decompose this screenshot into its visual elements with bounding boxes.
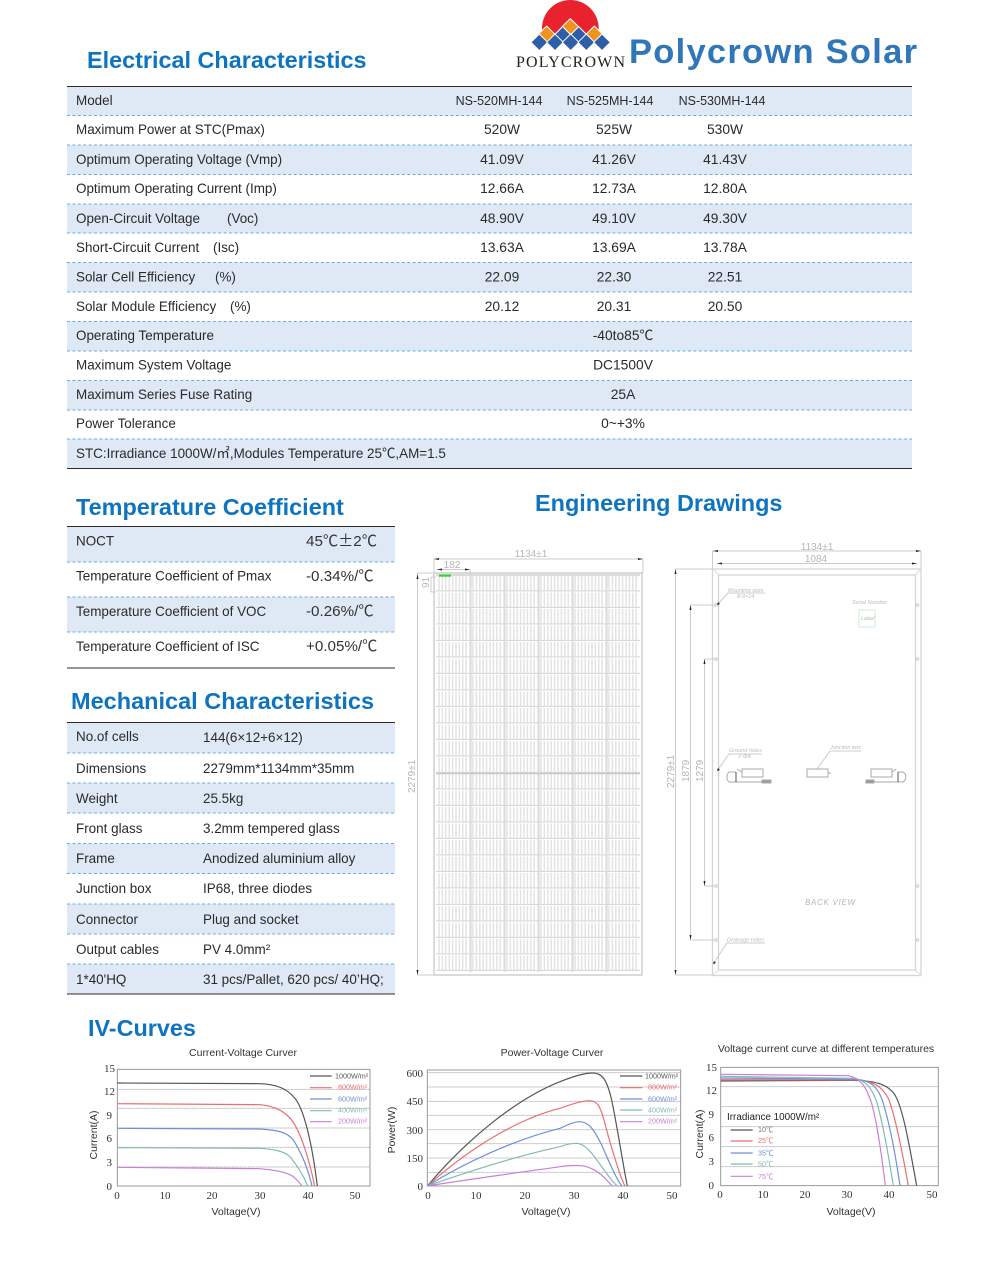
row: Power Tolerance: 0~+3% [601, 416, 645, 431]
panel: temperature coefficient table [67, 526, 395, 668]
x axis labels: 20 [520, 1190, 531, 1202]
y axis labels: 0 [708, 1180, 714, 1192]
row: Module Efficiency [76, 299, 743, 314]
x axis labels: 40 [302, 1190, 314, 1202]
row: Model [76, 93, 765, 108]
row: Voc: 48.90V [480, 211, 525, 226]
x axis labels: 0 [717, 1189, 723, 1201]
dimension: 1879: 1879 [681, 759, 692, 782]
row: NOCT: NOCT [76, 534, 114, 548]
row: Fuse Rating: Maximum Series Fuse Rating [76, 387, 252, 402]
row: cells [76, 729, 303, 745]
connector: centre junction box [807, 769, 831, 777]
dimension: width 1134: 1134±1 [801, 542, 834, 553]
y axis labels: 300 [406, 1125, 424, 1137]
row: System Voltage: Maximum System Voltage [76, 358, 231, 372]
chart: power-voltage curves [386, 1047, 681, 1218]
row: frame: Frame [76, 851, 115, 866]
row: weight: Weight [76, 791, 118, 806]
row: Cell Efficiency [76, 270, 742, 284]
row: STC note: STC:Irradiance 1000W/㎡,Modules Temperature 25℃,AM=1.5 [76, 446, 446, 461]
y axis labels: 9 [106, 1110, 112, 1122]
front green marker [439, 574, 451, 577]
x axis labels: 30 [254, 1190, 266, 1202]
logo: Polycrown emblem [532, 0, 610, 50]
row: Isc: (Isc) [213, 240, 239, 255]
row: ISC coefficient: +0.05%/℃ [306, 638, 377, 655]
row: Imp: Optimum Operating Current (Imp) [76, 181, 277, 196]
legend: irradiance: 400W/m² [648, 1106, 678, 1114]
row: Pmax coefficient [76, 568, 374, 585]
heading: IV-Curves: IV-Curves [88, 1015, 196, 1041]
legend: irradiance [335, 1072, 369, 1126]
legend: temperatures: 50℃ [758, 1160, 773, 1168]
x axis labels: 40 [884, 1189, 895, 1201]
legend: irradiance: 600W/m² [648, 1094, 678, 1104]
dimension: width 1084: 1084 [805, 554, 828, 565]
row: Voc: (Voc) [227, 211, 258, 226]
legend: temperatures: 10℃ [758, 1125, 773, 1134]
row: Isc: 13.63A [480, 240, 525, 255]
legend: temperatures: 25℃ [758, 1136, 773, 1145]
row: Imp: 12.66A [480, 181, 525, 196]
dimension: height 2279: 2279±1 [407, 759, 418, 793]
y axis labels: 3 [106, 1157, 112, 1169]
row: Operating Temperature: Operating Temperature [76, 328, 214, 343]
row: container loading [76, 972, 384, 987]
y axis labels: 15 [706, 1062, 718, 1074]
dimension: 182 [437, 560, 470, 575]
row: Operating Temperature: -40to85℃ [593, 328, 653, 343]
legend: irradiance: 800W/m² [648, 1082, 678, 1092]
row: Vmp: 41.43V [703, 152, 748, 167]
note: serial number label [852, 600, 888, 627]
row: Isc [76, 240, 748, 255]
row: Vmp: Optimum Operating Voltage (Vmp) [76, 152, 282, 167]
row: connector: Plug and socket [203, 912, 299, 927]
row: Module Efficiency: 20.50 [708, 299, 743, 314]
chart: current-voltage curves [88, 1047, 370, 1218]
heading: Mechanical Characteristics: Mechanical Characteristics [71, 688, 374, 714]
y axis labels: 450 [406, 1096, 424, 1108]
dimension: width 1134: 1134±1 [515, 549, 548, 560]
dimension: height 2279 [407, 573, 434, 975]
row: frame: Anodized aluminium alloy [203, 851, 356, 866]
x axis labels: 0 [114, 1190, 120, 1202]
row: Maximum Power: 520W [484, 122, 520, 137]
y axis labels: 150 [406, 1153, 424, 1165]
row: VOC coefficient [76, 603, 374, 620]
row: System Voltage: DC1500V [593, 358, 654, 372]
row: junction box: Junction box [76, 881, 152, 896]
row: Imp: 12.73A [592, 181, 637, 196]
row: junction box [76, 881, 312, 896]
chart: voltage-current curves at temperatures [694, 1043, 938, 1218]
row: Model: NS-525MH-144 [567, 94, 653, 108]
dimension: 1279: 1279 [695, 759, 706, 782]
heading: Temperature Coefficient: Temperature Coefficient [76, 494, 344, 520]
legend: irradiance: 600W/m² [338, 1094, 368, 1104]
row: Maximum Power [76, 122, 743, 137]
dimension: 91: 91 [421, 576, 432, 588]
row: junction box: IP68, three diodes [203, 881, 312, 896]
legend: irradiance: 1000W/m² [645, 1072, 679, 1080]
row: front glass: Front glass [76, 821, 143, 836]
note: mounting slots [717, 588, 765, 605]
note: ground holes: 2-Φ4 [737, 754, 751, 760]
row: Imp: 12.80A [703, 181, 748, 196]
row: weight: 25.5kg [203, 791, 243, 806]
row: Pmax coefficient: -0.34%/℃ [306, 568, 374, 585]
row: Vmp: 41.09V [480, 152, 525, 167]
row: Vmp [76, 152, 748, 167]
legend: irradiance: 200W/m² [338, 1116, 368, 1126]
row: Module Efficiency: (%) [230, 299, 251, 314]
axis title: voltage: Voltage(V) [521, 1206, 571, 1218]
row: System Voltage [76, 358, 654, 372]
row: dimensions: Dimensions [76, 761, 146, 776]
x axis labels: 30 [568, 1190, 580, 1202]
row: Isc: 13.69A [592, 240, 637, 255]
note: serial number label: Serial Number [852, 600, 888, 606]
note: mounting slots: Mounting slots [728, 588, 764, 594]
dimension: width 1134 [712, 542, 921, 569]
row: front glass: 3.2mm tempered glass [203, 821, 340, 836]
dimension: 182: 182 [444, 560, 461, 571]
row: Cell Efficiency: Solar Cell Efficiency [76, 270, 196, 284]
axis title: voltage: Voltage(V) [826, 1206, 876, 1218]
y axis labels: 12 [706, 1085, 717, 1097]
dimension: 91 [421, 576, 436, 592]
x axis labels: 10 [160, 1190, 171, 1202]
x axis labels: 10 [758, 1189, 769, 1201]
note: serial number label: Label [861, 616, 875, 622]
x axis labels: 50 [926, 1189, 938, 1201]
y axis labels: 9 [708, 1109, 714, 1121]
dimension: width 1134 [434, 549, 643, 573]
note: ground holes [717, 748, 762, 771]
connector: left cable [727, 769, 771, 783]
row: Pmax coefficient: Temperature Coefficient of Pmax [76, 568, 272, 584]
y axis labels: 0 [106, 1181, 112, 1193]
row: Isc: 13.78A [703, 240, 748, 255]
row: connector: Connector [76, 912, 139, 927]
row: Module Efficiency: Solar Module Efficiency [76, 299, 216, 314]
x axis labels: 30 [842, 1189, 853, 1201]
x axis labels: 50 [350, 1190, 361, 1202]
dimension: height 2279: 2279±1 [666, 754, 677, 788]
dimension: 1879 [681, 605, 715, 940]
legend: irradiance: 200W/m² [648, 1116, 678, 1126]
note: back view: BACK VIEW [805, 898, 857, 907]
row: Model: NS-530MH-144 [679, 94, 765, 108]
axis title: current: Current(A) [88, 1110, 100, 1160]
y axis labels: 6 [106, 1133, 112, 1145]
logo wordmark: POLYCROWN: POLYCROWN [516, 54, 625, 71]
row: weight [76, 791, 243, 806]
y axis labels: 0 [418, 1181, 424, 1193]
row: dimensions: 2279mm*1134mm*35mm [203, 761, 354, 776]
row: Operating Temperature [76, 328, 653, 343]
note: junction box [817, 745, 861, 769]
row: container loading: 1*40'HQ [76, 972, 126, 987]
panel: mechanical characteristics table [67, 722, 395, 994]
legend title: irradiance: Irradiance 1000W/m² [727, 1112, 820, 1123]
legend: irradiance: 1000W/m² [335, 1072, 369, 1080]
y axis labels [706, 1062, 718, 1192]
y axis labels: 600 [406, 1068, 424, 1080]
dimension: height 2279 [666, 569, 712, 975]
row: VOC coefficient: Temperature Coefficient of VOC [76, 604, 266, 619]
row: Imp [76, 181, 748, 196]
note: mounting slots: 8-9×14 [737, 594, 754, 600]
x axis labels: 10 [470, 1190, 482, 1202]
chart: voltage-current curves at temperatures: Voltage current curve at different temperatures [718, 1043, 934, 1055]
legend: temperatures [758, 1125, 773, 1181]
drawing: back view of module [666, 542, 921, 976]
row: frame [76, 851, 356, 866]
axis title: voltage: Voltage(V) [211, 1206, 261, 1218]
legend: irradiance: 400W/m² [338, 1106, 368, 1114]
row: Voc: Open-Circuit Voltage [76, 211, 200, 226]
legend: irradiance: 800W/m² [338, 1082, 368, 1092]
y axis labels: 15 [104, 1063, 116, 1075]
drawing: front view of module [407, 549, 643, 975]
axis title: current: Current(A) [694, 1109, 706, 1159]
x axis labels: 50 [666, 1190, 678, 1202]
row: output cables [76, 942, 271, 957]
row: Voc [76, 211, 748, 226]
y axis labels: 12 [104, 1086, 115, 1098]
x axis labels [425, 1190, 678, 1202]
row: ISC coefficient [76, 638, 377, 655]
row: Voc: 49.10V [592, 211, 637, 226]
row: Fuse Rating [76, 387, 636, 402]
row: Cell Efficiency: 22.51 [708, 270, 742, 284]
row: Cell Efficiency: (%) [215, 270, 236, 284]
title: Electrical Characteristics: Electrical Characteristics [87, 47, 367, 73]
note: ground holes: Ground holes [729, 748, 762, 754]
row: Cell Efficiency: 22.30 [597, 270, 632, 284]
y axis labels: 3 [708, 1156, 714, 1168]
chart: power-voltage curves: Power-Voltage Curver [501, 1047, 604, 1059]
legend: irradiance [645, 1072, 679, 1126]
legend: temperatures: 75℃ [758, 1172, 773, 1181]
row: Power Tolerance: Power Tolerance [76, 416, 176, 431]
x axis labels: 0 [425, 1190, 431, 1202]
row: Maximum Power: 525W [596, 122, 632, 137]
row: Isc: Short-Circuit Current [76, 240, 199, 255]
dimension: 1279 [695, 659, 715, 886]
row: Power Tolerance [76, 416, 645, 431]
y axis labels [104, 1063, 116, 1193]
row: connector [76, 912, 299, 927]
y axis labels: 6 [708, 1132, 714, 1144]
row: ISC coefficient: Temperature Coefficient of ISC [76, 639, 260, 654]
x axis labels: 20 [206, 1190, 218, 1202]
row: NOCT [76, 529, 377, 551]
note: drainage holes [713, 938, 765, 964]
x axis labels [114, 1190, 361, 1202]
note: drainage holes: Drainage holes [727, 938, 764, 944]
connector: right cable [865, 769, 906, 783]
y axis labels [406, 1068, 424, 1193]
row: Voc: 49.30V [703, 211, 748, 226]
brand name: Polycrown Solar: Polycrown Solar [629, 33, 917, 71]
axis title: power: Power(W) [386, 1107, 398, 1153]
row: Model: NS-520MH-144 [456, 94, 542, 108]
note: junction box: Junction box [829, 745, 861, 751]
mounting holes [715, 604, 919, 941]
row: output cables: Output cables [76, 942, 159, 957]
row: dimensions [76, 761, 354, 776]
x axis labels: 20 [800, 1189, 811, 1201]
row: Fuse Rating: 25A [611, 387, 636, 402]
row: Module Efficiency: 20.12 [485, 299, 519, 314]
x axis labels: 40 [618, 1190, 629, 1202]
row: Model: Model [76, 93, 113, 108]
row: NOCT: 45℃±2℃ [306, 529, 377, 551]
row: output cables: PV 4.0mm² [203, 942, 271, 957]
x axis labels [717, 1189, 938, 1201]
heading: Engineering Drawings: Engineering Drawings [535, 490, 782, 516]
chart: current-voltage curves: Current-Voltage Curver [189, 1047, 297, 1059]
row: Cell Efficiency: 22.09 [485, 270, 520, 284]
row: cells: 144(6×12+6×12) [203, 730, 303, 745]
row: VOC coefficient: -0.26%/℃ [306, 603, 374, 620]
row: Maximum Power: Maximum Power at STC(Pmax) [76, 122, 265, 137]
row: cells: No.of cells [76, 729, 139, 744]
row: Module Efficiency: 20.31 [597, 299, 631, 314]
row: Maximum Power: 530W [707, 122, 743, 137]
row: container loading: 31 pcs/Pallet, 620 pcs/ 40’HQ; [203, 972, 384, 987]
row: front glass [76, 821, 340, 836]
legend: temperatures: 35℃ [758, 1148, 773, 1158]
row: Vmp: 41.26V [592, 152, 637, 167]
panel: electrical characteristics table [67, 86, 912, 469]
